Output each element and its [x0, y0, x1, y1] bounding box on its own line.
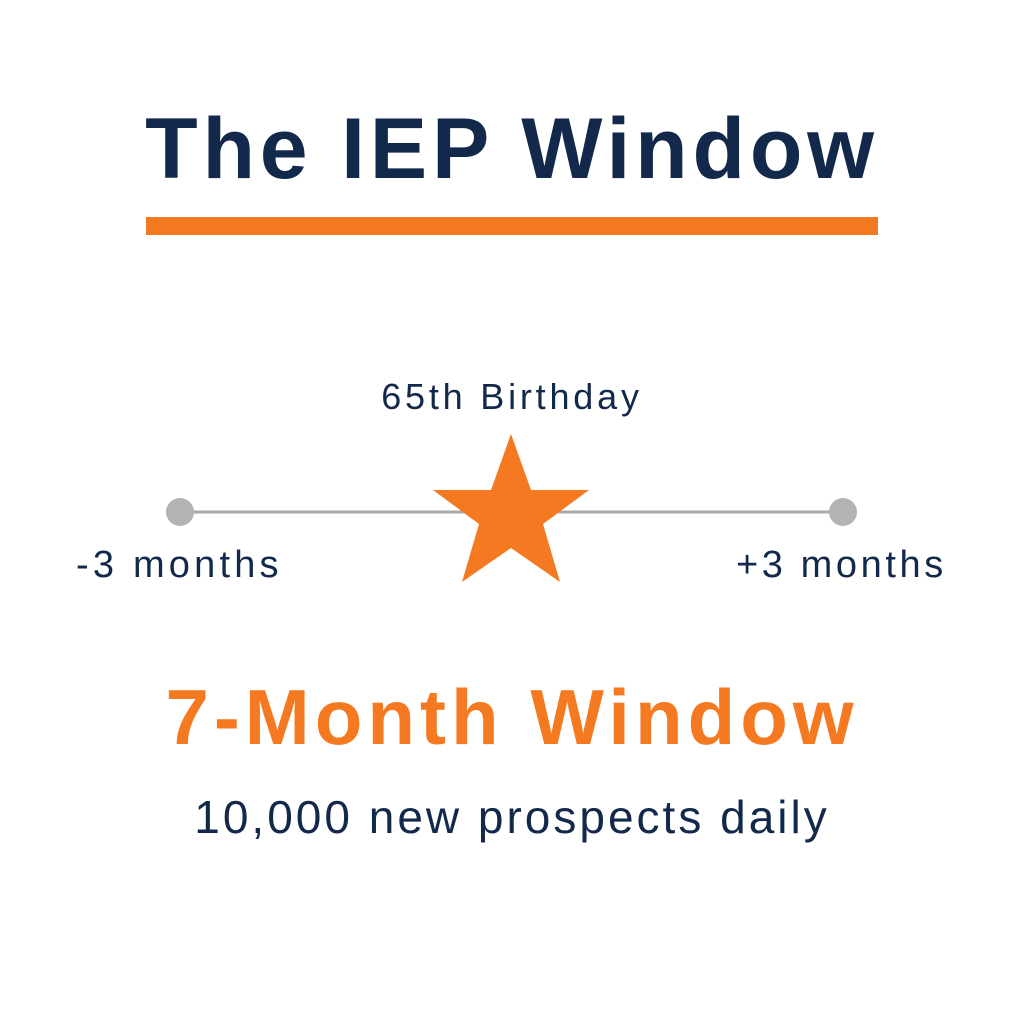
- label: +3 months: +3 months: [736, 544, 947, 586]
- headline: 7-Month Window: 7-Month Window: [165, 673, 859, 761]
- subtitle: 10,000 new prospects daily: [194, 791, 830, 843]
- label: -3 months: -3 months: [76, 544, 283, 586]
- title: The IEP Window: [145, 101, 879, 197]
- label: 65th Birthday: 65th Birthday: [381, 376, 643, 417]
- timeline: [166, 434, 857, 582]
- icon: star: [433, 434, 589, 582]
- title underline: [146, 217, 878, 235]
